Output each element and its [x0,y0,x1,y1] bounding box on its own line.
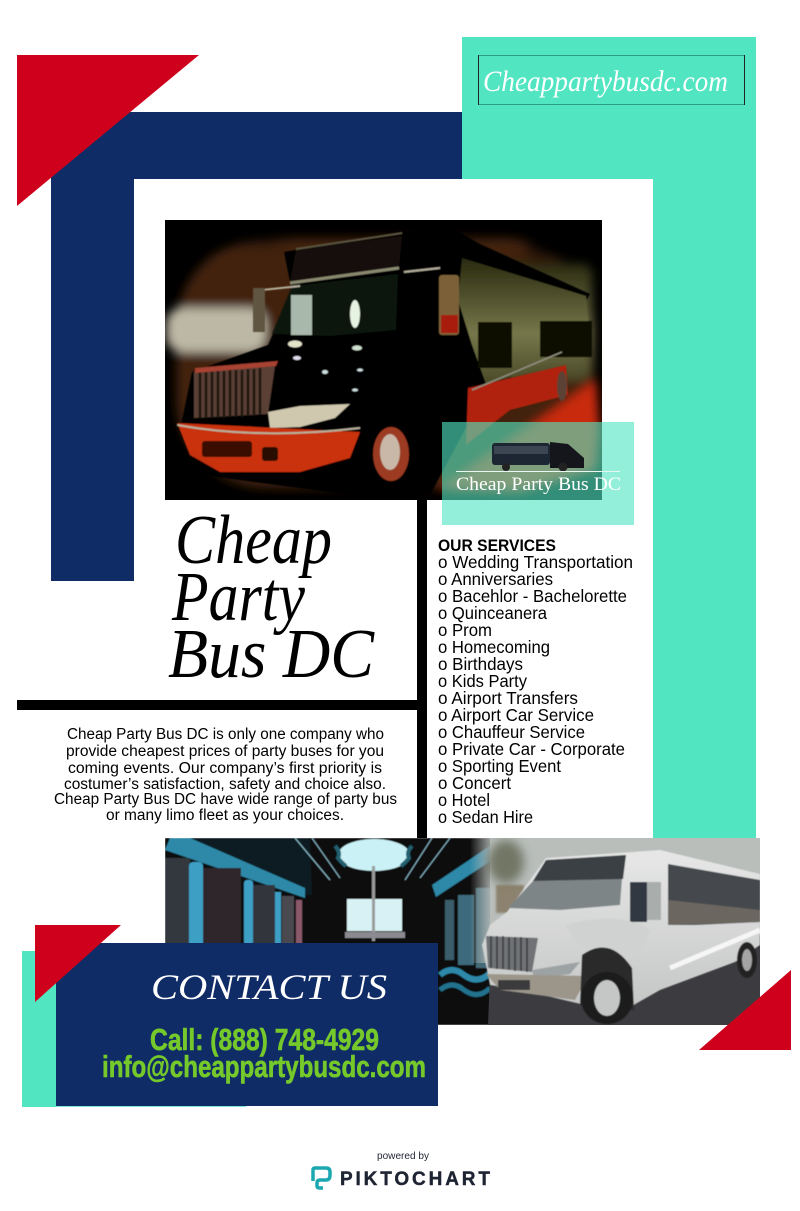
logo overlay panel [442,422,634,525]
logo overlay panel: Cheap Party Bus DC [456,474,621,495]
description paragraph: coming events. Our company’s first priority is [68,760,382,777]
photo: bus interior and white bus [165,838,760,1025]
divider: horizontal black [17,700,417,710]
icon: small bus [492,442,584,472]
mirror [439,275,459,335]
title: Cheap [175,502,332,579]
contact email: info@cheappartybusdc.com [102,1049,426,1084]
powered by piktochart: powered by [377,1151,429,1162]
description paragraph: Cheap Party Bus DC have wide range of party bus [54,791,397,808]
headlight [268,404,350,428]
title: Party [171,559,306,636]
description paragraph [54,726,397,824]
description paragraph: Cheap Party Bus DC is only one company who [67,726,384,743]
panel: navy contact [56,943,438,1106]
description paragraph: or many limo fleet as your choices. [106,807,344,824]
services list: o Prom [438,620,492,640]
title [168,502,375,693]
triangle: contact red [35,925,121,1002]
triangle: bottom-right red [699,970,791,1050]
services list: o Sporting Event [438,756,561,776]
services list: o Airport Car Service [438,705,594,725]
exterior background [490,838,760,935]
website label box: Cheappartybusdc.com [483,65,728,98]
background panel: navy [51,112,462,581]
description paragraph: costumer’s satisfaction, safety and choice also. [64,776,386,793]
services list [438,536,633,827]
services list: o Anniversaries [438,569,553,589]
interior [165,838,505,1025]
services list: o Kids Party [438,671,527,691]
divider: vertical black [417,500,427,838]
services list: o Quinceanera [438,603,547,623]
panel: white content [134,179,653,838]
description paragraph: provide cheapest prices of party buses for you [66,743,384,760]
title: Bus DC [168,616,375,693]
white bus [482,850,760,1024]
photo: black party bus [165,220,602,500]
powered by piktochart: PIKTOCHART [340,1169,490,1190]
services list: o Sedan Hire [438,807,533,827]
bumper [177,423,360,472]
services list: o Bacehlor - Bachelorette [438,586,627,606]
services list: OUR SERVICES [438,536,556,555]
bus body [177,228,592,495]
highlights [291,295,312,335]
triangle: top-left red [17,55,199,206]
services list: o Private Car - Corporate [438,739,625,759]
contact heading: CONTACT US [151,967,387,1007]
icon: piktochart logo [313,1168,330,1188]
services list: o Hotel [438,790,490,810]
wheel [373,427,410,448]
services list: o Wedding Transportation [438,552,633,572]
services list: o Airport Transfers [438,688,578,708]
services list: o Birthdays [438,654,523,674]
services list: o Chauffeur Service [438,722,585,742]
panel: teal contact backing [22,951,246,1107]
services list: o Concert [438,773,511,793]
services list: o Homecoming [438,637,550,657]
background panel: teal [462,37,756,838]
grille [194,366,275,418]
powered by piktochart [313,1151,490,1190]
website label box [478,55,745,105]
contact phone: Call: (888) 748-4929 [150,1022,379,1057]
